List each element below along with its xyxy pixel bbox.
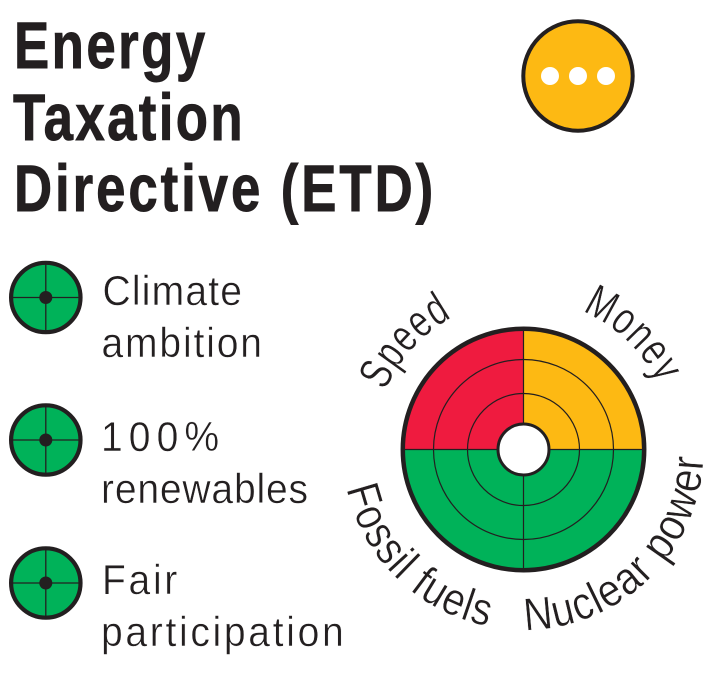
label: fair participation: Fair	[102, 556, 177, 603]
axis label: speed: Speed	[360, 290, 450, 386]
title: Energy	[14, 8, 205, 82]
quadrant: money (amber)	[524, 329, 644, 450]
axis label: nuclear power: Nuclear power	[525, 456, 704, 630]
title: Directive (ETD)	[14, 151, 433, 225]
title	[13, 8, 433, 225]
quadrant: fossil fuels (green)	[403, 450, 524, 570]
quadrant: speed (red)	[403, 329, 524, 450]
icon: green target	[11, 548, 80, 618]
label: fair participation: participation	[101, 608, 344, 655]
title: Taxation	[13, 80, 243, 154]
label: 100% renewables: renewables	[101, 465, 308, 512]
label: climate ambition	[102, 267, 262, 366]
radial chart: four quadrant rating	[403, 329, 644, 570]
centre hole	[498, 424, 549, 475]
label: fair participation	[101, 556, 344, 655]
legend item: climate ambition	[11, 263, 262, 366]
label: climate ambition: ambition	[102, 319, 262, 366]
label: climate ambition: Climate	[102, 267, 242, 314]
icon: green target	[11, 263, 80, 332]
legend item: 100% renewables	[11, 405, 308, 512]
legend item: fair participation	[11, 548, 344, 655]
label: 100% renewables	[101, 413, 308, 512]
quadrant: nuclear power (green)	[524, 450, 644, 570]
label: 100% renewables: 100%	[101, 413, 219, 460]
icon: amber status circle with three dots	[523, 21, 633, 131]
icon: green target	[11, 405, 80, 475]
axis label: money: Money	[585, 284, 680, 378]
axis label: fossil fuels: Fossil fuels	[347, 482, 491, 625]
